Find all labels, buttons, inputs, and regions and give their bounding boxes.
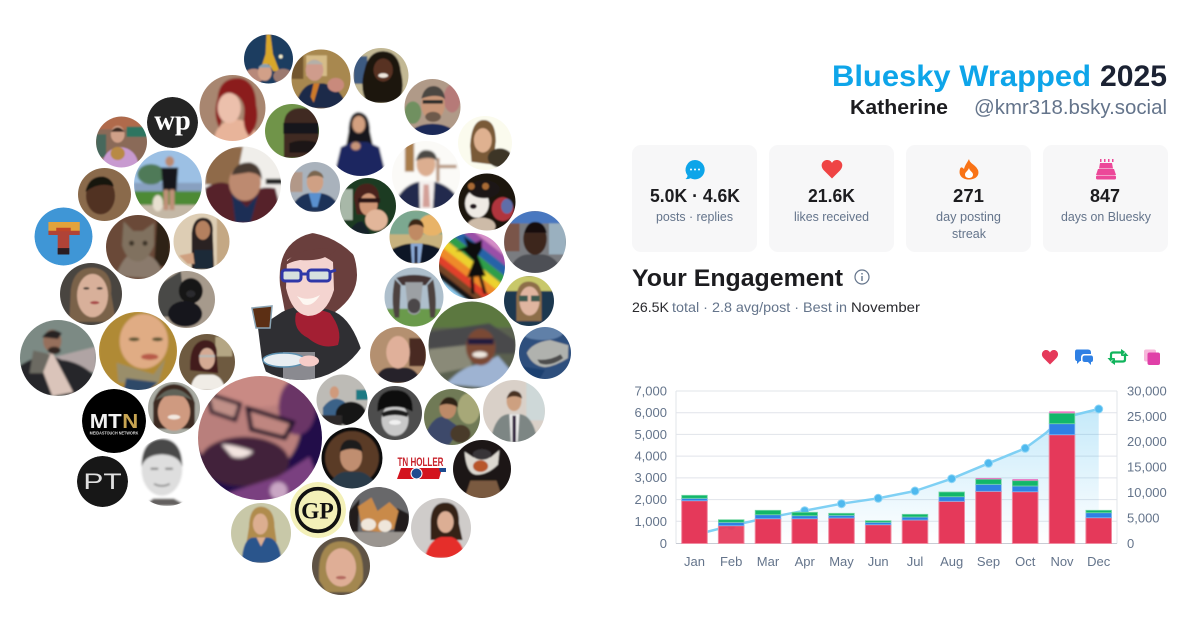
stat value: 271 bbox=[953, 186, 984, 206]
right axis labels bbox=[1127, 384, 1167, 551]
month labels: Jan bbox=[684, 554, 705, 569]
plate bbox=[263, 353, 305, 367]
avatar: man close-up bbox=[78, 168, 131, 221]
month labels: Jun bbox=[868, 554, 889, 569]
user name and handle bbox=[850, 97, 1167, 119]
legend icons bbox=[1042, 349, 1160, 365]
skirt bbox=[283, 352, 315, 382]
avatar: MTN logo: MT bbox=[90, 410, 122, 433]
avatar: long-horned bull bbox=[384, 268, 444, 326]
avatar: bearded man lying down bbox=[20, 320, 96, 396]
avatar: TN Holler logo: TN HOLLER bbox=[398, 457, 444, 469]
month labels: Apr bbox=[795, 554, 815, 569]
engagement summary: 26.5K bbox=[632, 299, 670, 315]
avatar: woman with green glasses bbox=[504, 276, 554, 326]
stat label: days on Bluesky bbox=[1061, 209, 1151, 224]
month labels: Dec bbox=[1087, 554, 1111, 569]
stat value: 5.0K · 4.6K bbox=[650, 186, 740, 206]
avatar: man in hoodie bbox=[504, 211, 566, 273]
icon: quotes bbox=[1144, 350, 1160, 365]
title: 2025 bbox=[1100, 60, 1167, 93]
reposts bars bbox=[682, 413, 1112, 522]
avatar: black dog bbox=[158, 271, 215, 328]
avatar: young man at the Capitol bbox=[390, 210, 442, 264]
replies bars bbox=[682, 424, 1112, 526]
left axis labels bbox=[634, 384, 667, 551]
grid lines bbox=[676, 391, 1117, 544]
stat value: 21.6K bbox=[808, 186, 855, 206]
panel: posting streak bbox=[906, 145, 1031, 252]
avatar: TN Holler logo bbox=[397, 457, 446, 479]
avatar: man in sunglasses bbox=[265, 104, 319, 158]
avatar: man in maroon sweater bbox=[205, 146, 281, 222]
left axis labels: 7,000 bbox=[634, 384, 667, 398]
stat value: 847 bbox=[1090, 186, 1120, 206]
avatar: GP seal: GP bbox=[301, 498, 334, 524]
month labels: Nov bbox=[1050, 554, 1074, 569]
icon: reposts bbox=[1108, 349, 1128, 365]
left axis labels: 1,000 bbox=[634, 514, 667, 529]
avatar: red panda illustration bbox=[447, 434, 517, 504]
right axis labels: 25,000 bbox=[1127, 409, 1167, 424]
coffee glass bbox=[252, 306, 272, 328]
left axis labels: 2,000 bbox=[634, 492, 667, 507]
avatar: man with coconut bbox=[96, 116, 147, 168]
avatar: T mosaic bbox=[34, 208, 92, 266]
avatar: tabby cat bbox=[106, 215, 170, 279]
avatar: blonde curly woman bbox=[306, 531, 376, 601]
user name and handle: @kmr318.bsky.social bbox=[974, 97, 1167, 119]
avatar: cavalier spaniel bbox=[458, 174, 516, 230]
avatar: rainbow silhouette bbox=[439, 233, 505, 299]
avatar: corgis bbox=[343, 481, 415, 553]
avatar: auburn-haired woman bbox=[179, 334, 235, 390]
panel: days on Bluesky bbox=[1043, 145, 1168, 252]
icon: like bbox=[1042, 350, 1058, 364]
avatar: woman in red shirt bbox=[405, 492, 477, 564]
scarf bbox=[295, 310, 339, 346]
right axis labels: 10,000 bbox=[1127, 485, 1167, 500]
fringe bbox=[282, 249, 336, 268]
avatar: Eiffel tower bbox=[244, 34, 293, 84]
avatar: PT logo: PT bbox=[83, 469, 122, 494]
likes bars bbox=[682, 435, 1112, 544]
right axis labels: 15,000 bbox=[1127, 460, 1167, 474]
avatar: shark bbox=[519, 327, 571, 379]
right axis labels: 30,000 bbox=[1127, 384, 1167, 398]
avatar: black and white with Nike cap bbox=[363, 381, 427, 445]
avatar: large purple-tinted smiling man bbox=[198, 376, 322, 500]
left axis labels: 3,000 bbox=[634, 470, 667, 485]
left axis labels: 6,000 bbox=[634, 405, 667, 420]
icon: replies bbox=[1075, 350, 1093, 365]
face bbox=[286, 253, 334, 316]
avatar: wp logo bbox=[147, 97, 198, 148]
right axis labels: 5,000 bbox=[1127, 510, 1160, 526]
avatar cloud bbox=[12, 30, 576, 601]
avatar: smiling woman bbox=[458, 116, 512, 170]
heading: Your Engagement: Your Engagement bbox=[632, 265, 843, 292]
stacked bars bbox=[682, 411, 1112, 544]
avatar: blonde woman close-up bbox=[99, 312, 177, 390]
smile bbox=[297, 295, 320, 305]
month labels bbox=[684, 554, 1111, 569]
month labels: May bbox=[829, 554, 854, 569]
right axis labels: 0 bbox=[1127, 536, 1134, 551]
left axis labels: 5,000 bbox=[634, 427, 667, 442]
avatar: Black woman smiling bbox=[354, 48, 408, 103]
avatar: cartoon character with coffee and plate bbox=[226, 232, 374, 384]
avatar: woman with red sunglasses bbox=[340, 178, 396, 234]
title: Bluesky Wrapped bbox=[832, 60, 1091, 93]
avatar: man in dark frame bbox=[315, 421, 389, 495]
hand bbox=[299, 356, 319, 366]
avatar: GP seal bbox=[290, 482, 346, 538]
icon: cake bbox=[1096, 159, 1116, 180]
avatar: MTN logo bbox=[82, 389, 146, 453]
icon: flame bbox=[960, 159, 978, 180]
avatar: Schumer bbox=[292, 50, 350, 108]
avatar: man in grey suit bbox=[477, 374, 551, 448]
avatar: woman selfie bbox=[60, 263, 122, 325]
cumulative area bbox=[694, 409, 1099, 543]
quotes bars bbox=[976, 411, 1075, 481]
engagement summary: total · 2.8 avg/post · Best in bbox=[672, 299, 847, 315]
cumulative line bbox=[694, 409, 1099, 535]
icon: chat bubble bbox=[686, 160, 705, 179]
left axis labels: 4,000 bbox=[634, 448, 667, 464]
stat label second line: streak bbox=[952, 226, 986, 241]
line markers bbox=[727, 405, 1103, 530]
panel: likes received bbox=[769, 145, 894, 252]
avatar: red hair woman bbox=[200, 75, 266, 141]
avatar: bearded man with pet bbox=[418, 383, 486, 451]
engagement summary bbox=[632, 299, 920, 315]
avatar: PT logo bbox=[77, 456, 128, 507]
avatar: senator in blue bbox=[290, 162, 340, 212]
month labels: Sep bbox=[977, 554, 1000, 569]
panel: posts and replies bbox=[632, 145, 757, 252]
avatar: dark-haired woman bbox=[174, 214, 230, 270]
icon: heart bbox=[822, 160, 842, 178]
hair back bbox=[280, 232, 357, 312]
avatar: man by the water bbox=[134, 150, 202, 218]
avatar: man in blue blazer bbox=[398, 142, 459, 209]
left axis labels: 0 bbox=[660, 536, 667, 551]
avatar: woman in knit hat bbox=[148, 382, 200, 434]
avatar: selfie man with trees bbox=[428, 302, 516, 388]
month labels: Jul bbox=[907, 554, 923, 569]
avatar: pencil sketch man bbox=[140, 438, 184, 506]
user name and handle: Katherine bbox=[850, 97, 948, 119]
avatar: woman in blue blouse bbox=[231, 503, 291, 563]
avatar: bald man bbox=[370, 327, 426, 383]
engagement summary: November bbox=[851, 299, 920, 315]
avatar: MTN logo: MEIDASTOUCH NETWORK bbox=[90, 430, 138, 435]
avatar: woman in navy suit bbox=[335, 110, 385, 176]
icon: info bbox=[855, 270, 869, 284]
avatar: man on couch with dog bbox=[311, 369, 373, 431]
month labels: Aug bbox=[940, 554, 963, 569]
jacket bbox=[258, 306, 362, 384]
stat label: likes received bbox=[794, 209, 869, 224]
avatar: wp logo: wp bbox=[154, 106, 191, 137]
stat label: day posting bbox=[936, 209, 1001, 224]
avatar: MTN logo: N bbox=[122, 410, 138, 433]
month labels: Mar bbox=[757, 554, 780, 569]
chart: monthly engagement bbox=[634, 384, 1167, 569]
right axis labels: 20,000 bbox=[1127, 434, 1167, 449]
glasses bbox=[282, 270, 336, 281]
stat label: posts · replies bbox=[656, 209, 733, 224]
avatar: man with glasses bbox=[404, 79, 460, 135]
month labels: Feb bbox=[720, 554, 742, 569]
month labels: Oct bbox=[1015, 554, 1036, 569]
